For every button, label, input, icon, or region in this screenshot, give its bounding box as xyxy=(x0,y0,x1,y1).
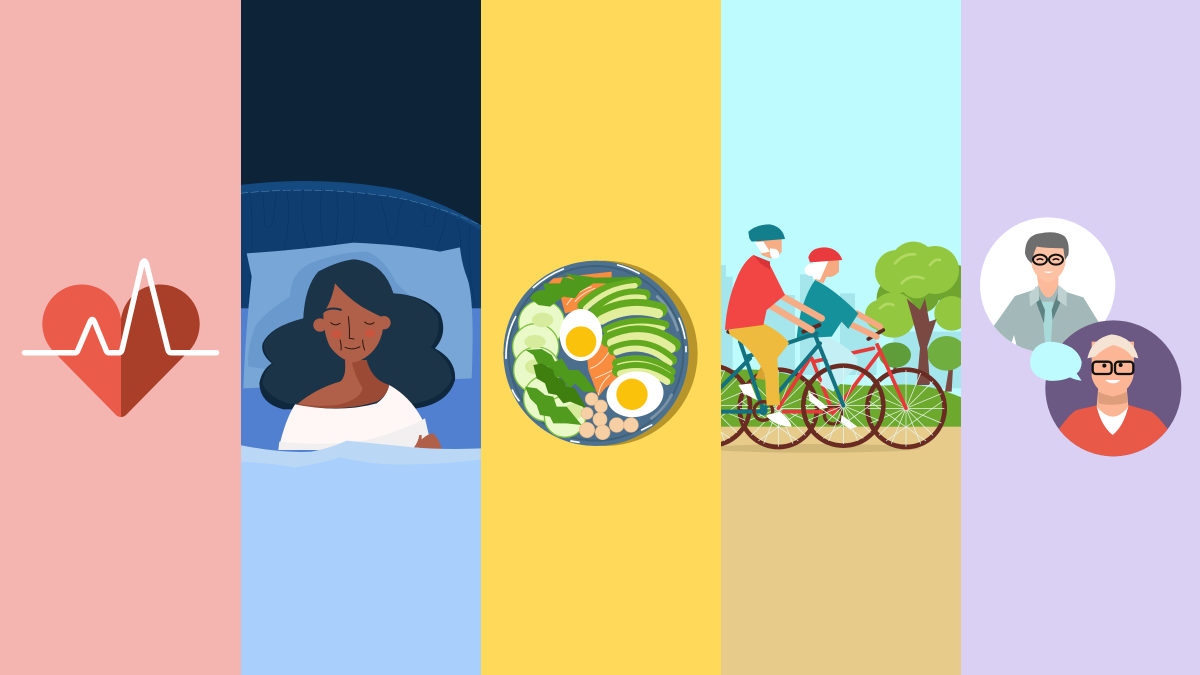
cucumber slices xyxy=(513,300,586,437)
woman rider xyxy=(797,247,880,429)
panel: heart health xyxy=(0,0,241,675)
avocado slices xyxy=(582,282,673,382)
panel: social connection xyxy=(961,0,1200,675)
portrait: man in grey shirt xyxy=(980,217,1116,351)
woman hair xyxy=(259,259,455,409)
panel: nutrition xyxy=(481,0,721,675)
boiled egg top xyxy=(560,309,602,361)
illustration: woman sleeping in bed xyxy=(240,181,483,675)
small background trees xyxy=(879,336,966,392)
speech bubble xyxy=(1030,342,1082,381)
headboard xyxy=(240,181,483,313)
chickpeas xyxy=(579,393,638,440)
portrait: older person in red sweater xyxy=(1045,320,1183,463)
blue bicycle xyxy=(721,322,886,448)
pillow xyxy=(243,243,473,388)
blanket xyxy=(240,441,483,675)
woman top xyxy=(278,385,442,450)
woman face and neck xyxy=(295,283,391,408)
icon: heart with pulse line xyxy=(24,261,216,417)
ground shadow xyxy=(707,444,920,453)
large tree xyxy=(865,242,961,385)
man rider xyxy=(725,224,822,427)
illustration: food bowl xyxy=(503,261,698,446)
panel: exercise xyxy=(721,0,961,675)
illustration: couple cycling in park xyxy=(721,224,961,675)
mattress xyxy=(240,308,483,462)
panel: sleep xyxy=(240,0,483,675)
city skyline xyxy=(721,265,963,388)
ground xyxy=(720,427,963,675)
red bicycle xyxy=(740,330,945,447)
salmon xyxy=(545,272,625,397)
boiled egg bottom xyxy=(603,367,667,422)
illustration: two people talking xyxy=(980,217,1183,463)
bowl xyxy=(503,261,698,446)
arugula leaves xyxy=(525,273,640,425)
hills xyxy=(720,369,963,428)
